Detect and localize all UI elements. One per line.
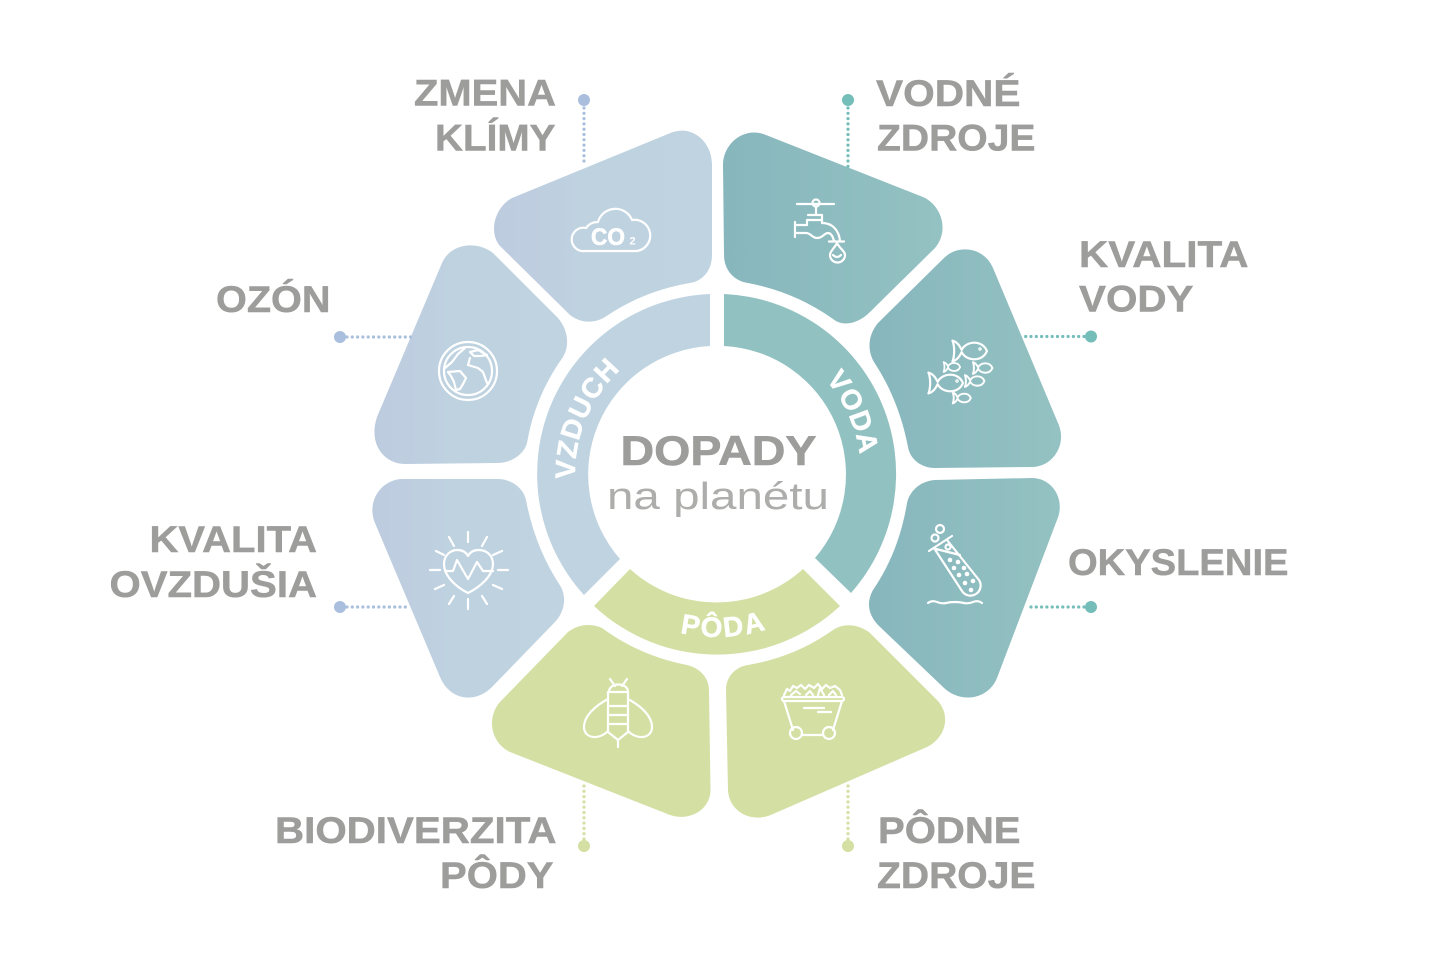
label: biodiverzita pôdy: PÔDY	[440, 854, 554, 896]
center title: na planétu	[607, 476, 829, 518]
ring segment: pôda: PÔDA	[682, 612, 766, 638]
label: kvalita vody: VODY	[1079, 278, 1194, 320]
icon: test tube	[928, 525, 982, 603]
panel: ozón	[374, 245, 567, 464]
petal: ozón	[374, 245, 567, 464]
label: kvalita vody: KVALITA	[1079, 234, 1248, 275]
petal: biodiverzita pôdy	[492, 625, 710, 817]
label: zmena klímy	[414, 72, 590, 166]
panel: okyslenie	[869, 478, 1060, 698]
panel: vodné zdroje	[723, 133, 943, 323]
center title	[607, 427, 829, 518]
label: pôdne zdroje: PÔDNE	[878, 809, 1020, 851]
icon: CO2 cloud	[572, 209, 650, 251]
label: okyslenie	[1027, 542, 1288, 613]
panel: zmena klímy	[494, 131, 712, 322]
icon: cart of soil	[782, 684, 844, 739]
icon: heart with pulse	[430, 532, 508, 609]
ring segment: pôda	[594, 569, 840, 655]
icon: bee	[584, 679, 652, 747]
label: zmena klímy: KLÍMY	[435, 118, 556, 158]
ring segment: voda: VODA	[830, 368, 878, 454]
label: zmena klímy: ZMENA	[414, 72, 556, 114]
label: kvalita ovzdušia	[110, 519, 410, 613]
center title: DOPADY	[620, 427, 816, 474]
label: ozón	[216, 278, 412, 343]
petal: vodné zdroje	[723, 133, 943, 323]
icon: globe	[439, 342, 497, 400]
icon: CO2 cloud: CO	[591, 224, 625, 251]
panel: biodiverzita pôdy	[492, 625, 710, 817]
panel: kvalita vody	[869, 249, 1061, 468]
label: pôdne zdroje	[842, 783, 1036, 896]
ring segment: vzduch	[537, 294, 710, 595]
icon: faucet with drop	[795, 200, 845, 262]
ring segment: voda	[724, 294, 896, 593]
label: pôdne zdroje: ZDROJE	[877, 855, 1036, 896]
label: okyslenie: OKYSLENIE	[1068, 542, 1288, 583]
panel: kvalita ovzdušia	[372, 479, 564, 698]
petal: zmena klímy	[494, 131, 712, 322]
label: vodné zdroje	[842, 73, 1036, 168]
petal: kvalita vody	[869, 249, 1061, 468]
label: kvalita ovzdušia: KVALITA	[150, 519, 317, 560]
label: biodiverzita pôdy	[275, 783, 590, 896]
icon: school of fish	[928, 341, 992, 403]
label: vodné zdroje: VODNÉ	[876, 73, 1020, 114]
ring segment: vzduch: VZDUCH	[555, 358, 619, 478]
petal: pôdne zdroje	[726, 625, 945, 818]
petal: kvalita ovzdušia	[372, 479, 564, 698]
label: ozón: OZÓN	[216, 278, 330, 320]
petal: okyslenie	[869, 478, 1060, 698]
icon: CO2 cloud: 2	[630, 236, 636, 248]
label: kvalita ovzdušia: OVZDUŠIA	[110, 563, 317, 605]
label: kvalita vody	[1022, 234, 1248, 342]
label: biodiverzita pôdy: BIODIVERZITA	[275, 810, 556, 851]
label: vodné zdroje: ZDROJE	[877, 118, 1036, 158]
panel: pôdne zdroje	[726, 625, 945, 818]
